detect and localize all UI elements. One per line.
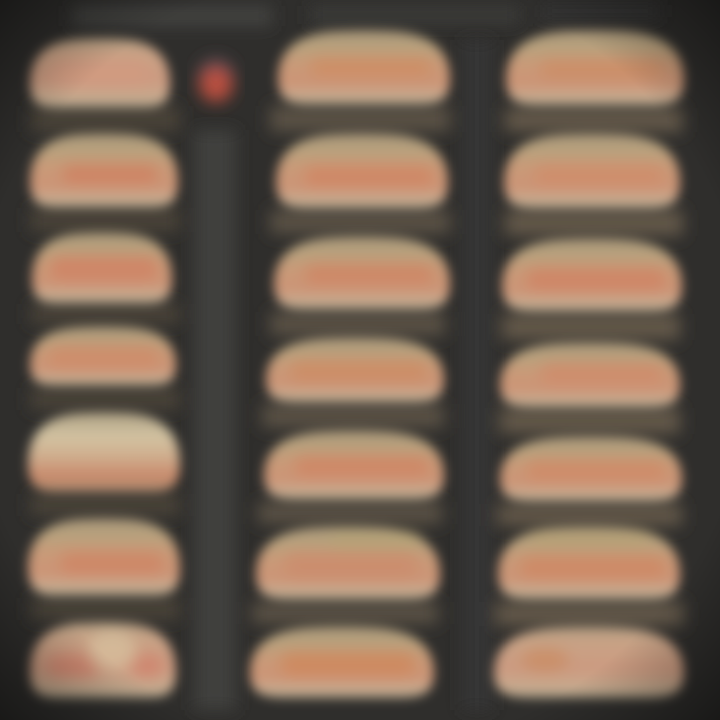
header bars (72, 4, 660, 26)
panel: column 3 row 7 (494, 626, 684, 698)
panel: column 2 row 3 (274, 236, 450, 310)
panel: column 3 row 1 (506, 30, 684, 106)
panel: column 1 row 5 (28, 412, 180, 492)
panel: column 3 row 5 (500, 436, 682, 502)
panel: column 1 row 6 (28, 518, 180, 596)
panel: column 2 row 4 (266, 337, 444, 403)
panel: column 1 row 3 (32, 232, 172, 304)
panel: column 3 row 4 (500, 342, 680, 408)
column 1 panels (28, 38, 180, 698)
panel: column 2 row 5 (264, 430, 444, 500)
panel: column 1 row 7 (30, 622, 176, 698)
panel: column 1 row 4 (30, 326, 176, 386)
column 3 panels (494, 30, 684, 698)
panel: column 2 row 2 (276, 133, 448, 209)
panel: column 2 row 1 (278, 30, 450, 105)
panel: column 3 row 2 (504, 133, 680, 209)
panel: column 3 row 6 (498, 526, 680, 600)
panel: column 3 row 3 (502, 238, 682, 312)
red indicator (198, 58, 234, 102)
column 2 panels (250, 30, 450, 698)
panel: column 2 row 7 (250, 626, 434, 698)
panel: column 2 row 6 (256, 526, 440, 600)
panel: column 1 row 2 (30, 133, 178, 208)
panel: column 1 row 1 (30, 38, 170, 108)
